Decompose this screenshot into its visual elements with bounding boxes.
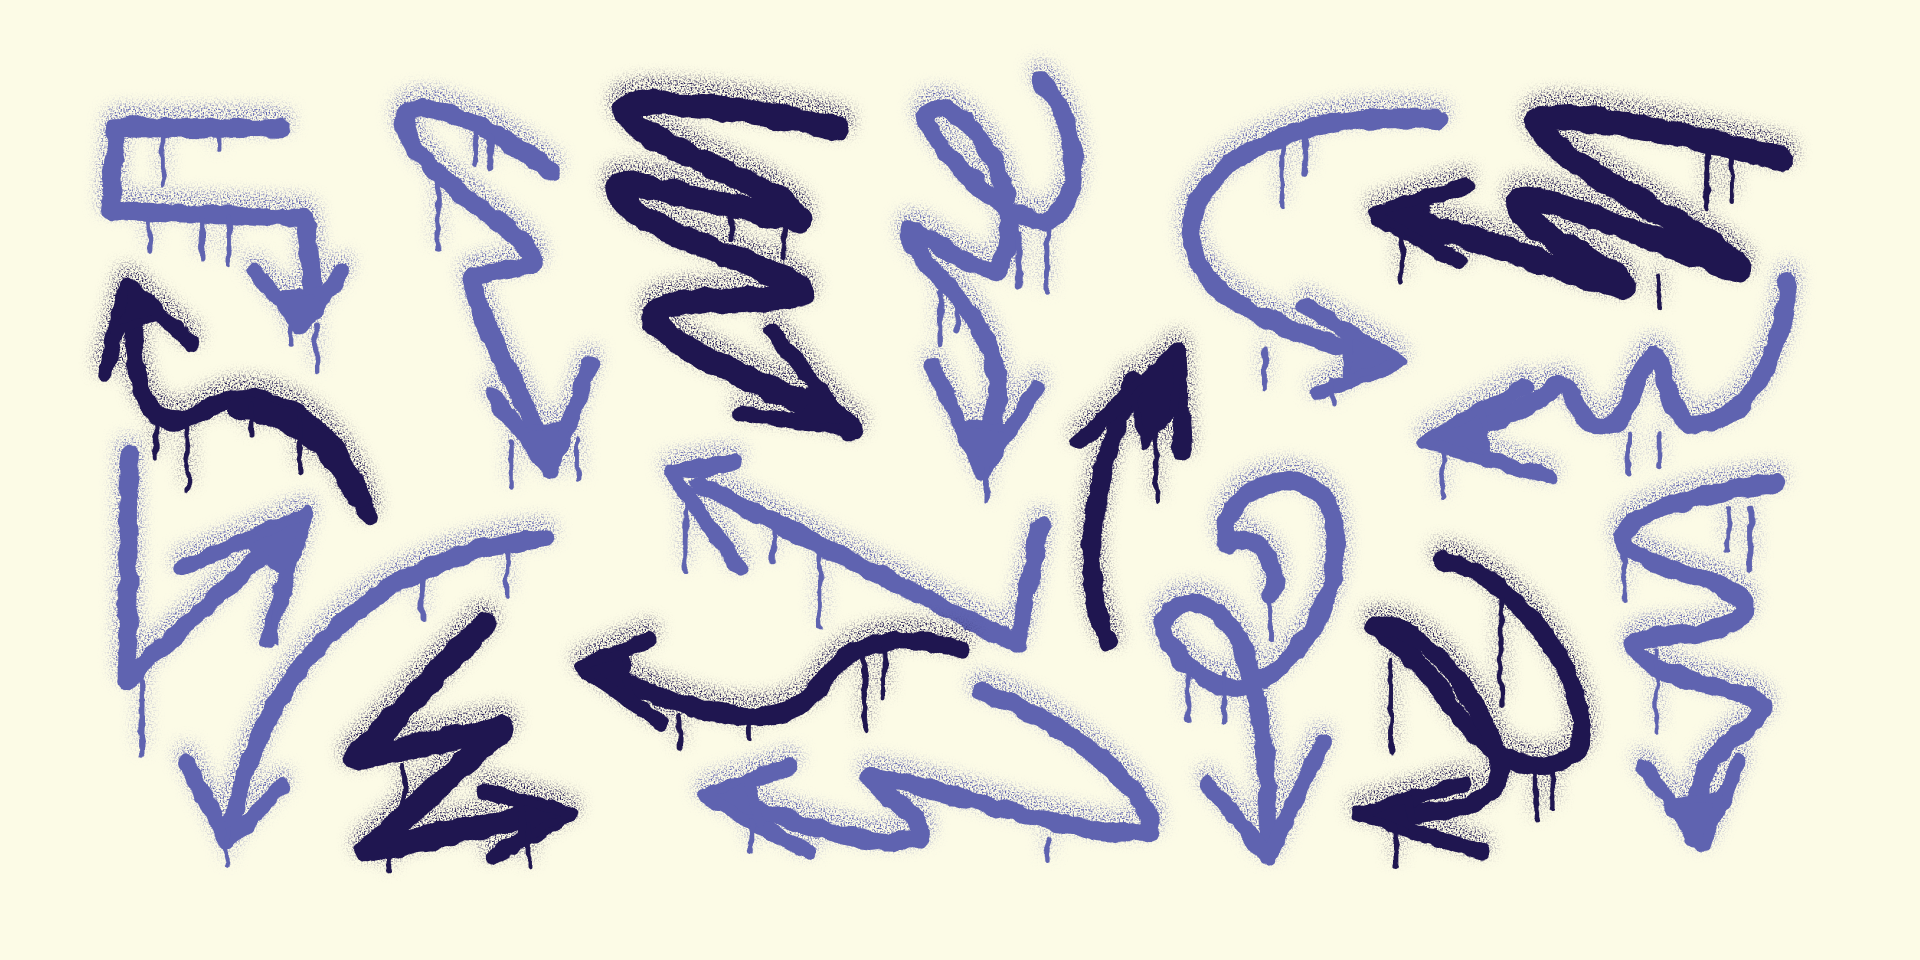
arrow: dark Z bottom left [355, 624, 569, 872]
arrow: periwinkle bottom Z [705, 692, 1151, 860]
arrow: periwinkle curve right [1191, 118, 1439, 404]
arrow: top-left periwinkle angular [110, 127, 343, 372]
arrow: periwinkle S down [404, 109, 590, 487]
arrow: periwinkle loop down [909, 81, 1073, 502]
arrow: dark zigzag top right [1376, 117, 1782, 306]
arrow: dark loop lower right [1359, 561, 1581, 864]
arrow: large curved periwinkle [186, 539, 545, 864]
arrow: periwinkle spiral down [1163, 481, 1336, 857]
arrow: dark up centre [1080, 350, 1183, 643]
arrow: periwinkle long diagonal [671, 463, 1041, 644]
arrow: periwinkle W left [1427, 282, 1788, 500]
arrow: periwinkle S bottom right [1622, 484, 1776, 845]
arrow: dark wavy up-left [105, 284, 367, 514]
arrow: dark zigzag top centre [618, 103, 851, 429]
arrow: dark wavy left centre [583, 639, 961, 749]
arrow: left periwinkle V [127, 456, 306, 754]
